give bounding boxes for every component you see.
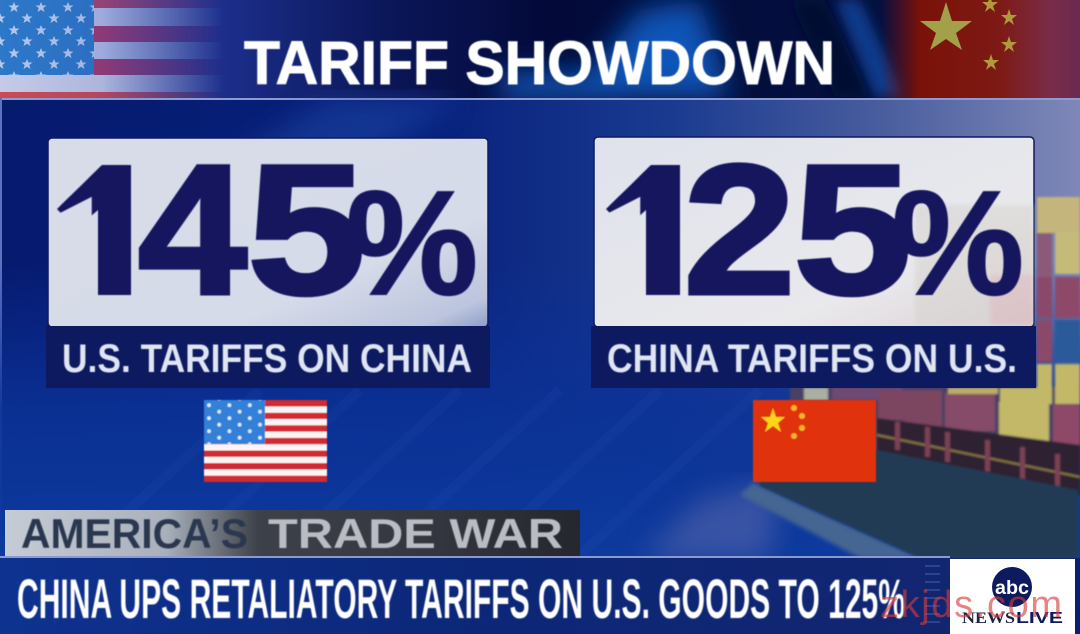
number: 125%: % [892,161,1024,326]
number: 145%: 5 [248,128,366,334]
label bar: U.S. tariffs on China [46,326,490,388]
banner text: Trade War: TRADE WAR [268,510,563,557]
panel: U.S. tariffs on China [45,128,490,388]
main panel background [0,98,1080,560]
icon: U.S. flag [204,400,327,482]
number: 145% [56,163,476,298]
ticker bar [0,556,950,634]
number: 145%: 1 [45,128,171,334]
number: 145%: 4 [138,128,247,334]
ship hull [740,450,1078,558]
card photo ghost [915,205,1033,325]
banner text: America's: AMERICA’S [21,510,248,557]
number: 125%: 5 [794,128,912,334]
icon: faded US flag in header [0,0,225,98]
cargo ship and containers photo [790,197,1080,495]
logo: News wordmark: NEWS [962,610,1015,627]
logo: abc letters: abc [995,578,1029,599]
logo: abc circle [992,567,1032,607]
banner: America's Trade War [5,510,580,557]
header band [0,0,1080,100]
icon: China flag [753,400,876,482]
label text: U.S. tariffs on China: U.S. TARIFFS ON CHINA [62,337,472,381]
card: U.S. tariff figure [48,138,488,327]
logo: Live wordmark: LIVE [1016,610,1063,627]
card: China tariff figure [594,137,1034,327]
number: 125% [606,162,1022,298]
title: TARIFF SHOWDOWN [244,29,835,97]
label text: China tariffs on U.S.: CHINA TARIFFS ON U.S. [607,337,1017,381]
watermark: zkjds.com [880,584,1062,626]
icon: faded China flag in header [880,0,1080,98]
panel: China tariffs on U.S. [591,128,1036,388]
logo: ABC News Live [950,559,1075,634]
number: 125%: 2 [684,128,796,334]
number: 145%: % [346,161,478,326]
label bar: China tariffs on U.S. [591,326,1036,388]
number: 125%: 1 [594,128,720,334]
